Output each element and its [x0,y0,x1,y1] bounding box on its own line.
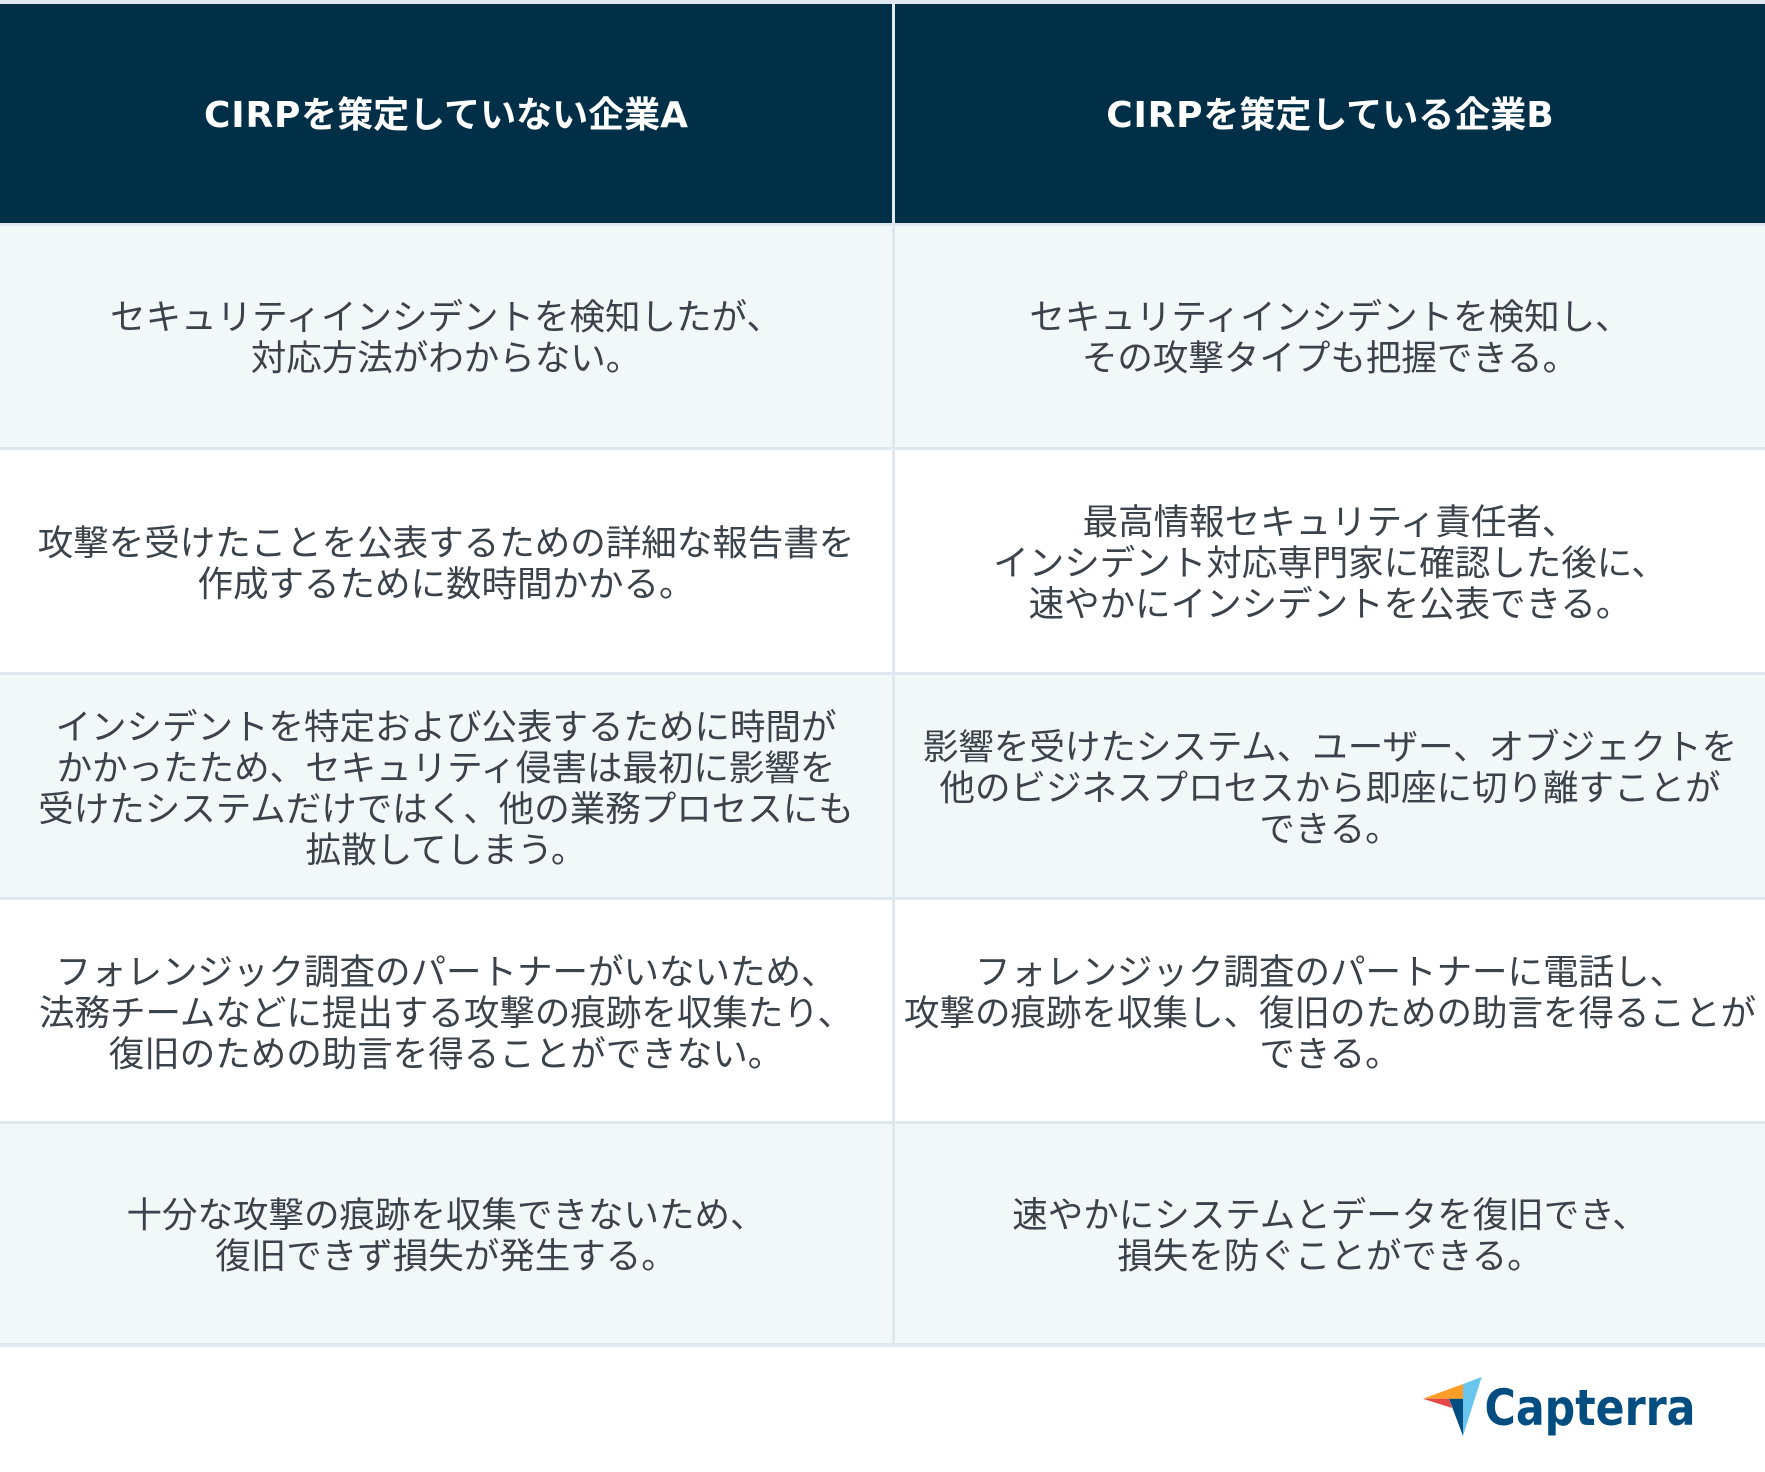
row 3 company A text: 拡散してしまう。 [306,822,586,872]
row 3 company B text: 影響を受けたシステム、ユーザー、オブジェクトを [923,719,1737,770]
row 2 company B text: 速やかにインシデントを公表できる。 [1029,576,1631,627]
logo: Capterra [1423,1377,1696,1437]
row 5 company A text [0,1124,892,1343]
row 1 company A text: 対応方法がわからない。 [251,330,641,381]
row 4 company B text: フォレンジック調査のパートナーに電話し、 [975,944,1685,994]
row 4 company A text: 法務チームなどに提出する攻撃の痕跡を収集たり、 [39,984,853,1036]
row 1 company A text: セキュリティインシデントを検知したが、 [110,289,782,340]
row 3 company B text [895,675,1765,897]
row 1 company A text [0,226,892,447]
row 5 company B text [895,1124,1765,1343]
heading: company B with CIRP [895,4,1765,223]
row 5 company A text: 十分な攻撃の痕跡を収集できないため、 [126,1187,766,1238]
row 2 company B text: 最高情報セキュリティ責任者、 [1083,494,1577,545]
heading: company B with CIRP: CIRPを策定している企業B [1106,95,1554,136]
row 5 company B text: 損失を防ぐことができる。 [1117,1228,1543,1279]
row 2 company B text: インシデント対応専門家に確認した後に、 [993,535,1667,586]
row 4 company B text [895,900,1765,1121]
row 3 company A text: インシデントを特定および公表するために時間が [55,698,836,750]
row 1 company B text: セキュリティインシデントを検知し、 [1029,289,1631,340]
row 4 company A text: フォレンジック調査のパートナーがいないため、 [55,944,836,994]
row 5 company A text: 復旧できず損失が発生する。 [215,1228,677,1279]
row 2 company A text [0,450,892,672]
row 1 company B text: その攻撃タイプも把握できる。 [1082,330,1578,381]
row 2 company A text: 作成するために数時間かかる。 [197,556,694,606]
row 3 company B text: 他のビジネスプロセスから即座に切り離すことが [939,760,1720,811]
row 4 company B text: 攻撃の痕跡を収集し、復旧のための助言を得ることが [904,984,1756,1036]
heading: company A without CIRP: CIRPを策定していない企業A [204,95,688,136]
row 2 company A text: 攻撃を受けたことを公表するための詳細な報告書を [38,514,854,566]
row 4 company A text: 復旧のための助言を得ることができない。 [109,1026,783,1076]
heading: company A without CIRP [0,4,892,223]
icon: Capterra arrow [1423,1377,1482,1436]
row 5 company B text: 速やかにシステムとデータを復旧でき、 [1012,1187,1648,1238]
row 3 company A text: 受けたシステムだけではく、他の業務プロセスにも [38,780,854,832]
row 3 company A text: かかったため、セキュリティ侵害は最初に影響を [57,740,835,790]
row 3 company A text [0,675,892,897]
row 2 company B text [895,450,1765,672]
row 4 company B text: できる。 [1259,1026,1401,1076]
row 1 company B text [895,226,1765,447]
row 4 company A text [0,900,892,1121]
row 3 company B text: できる。 [1259,801,1401,852]
